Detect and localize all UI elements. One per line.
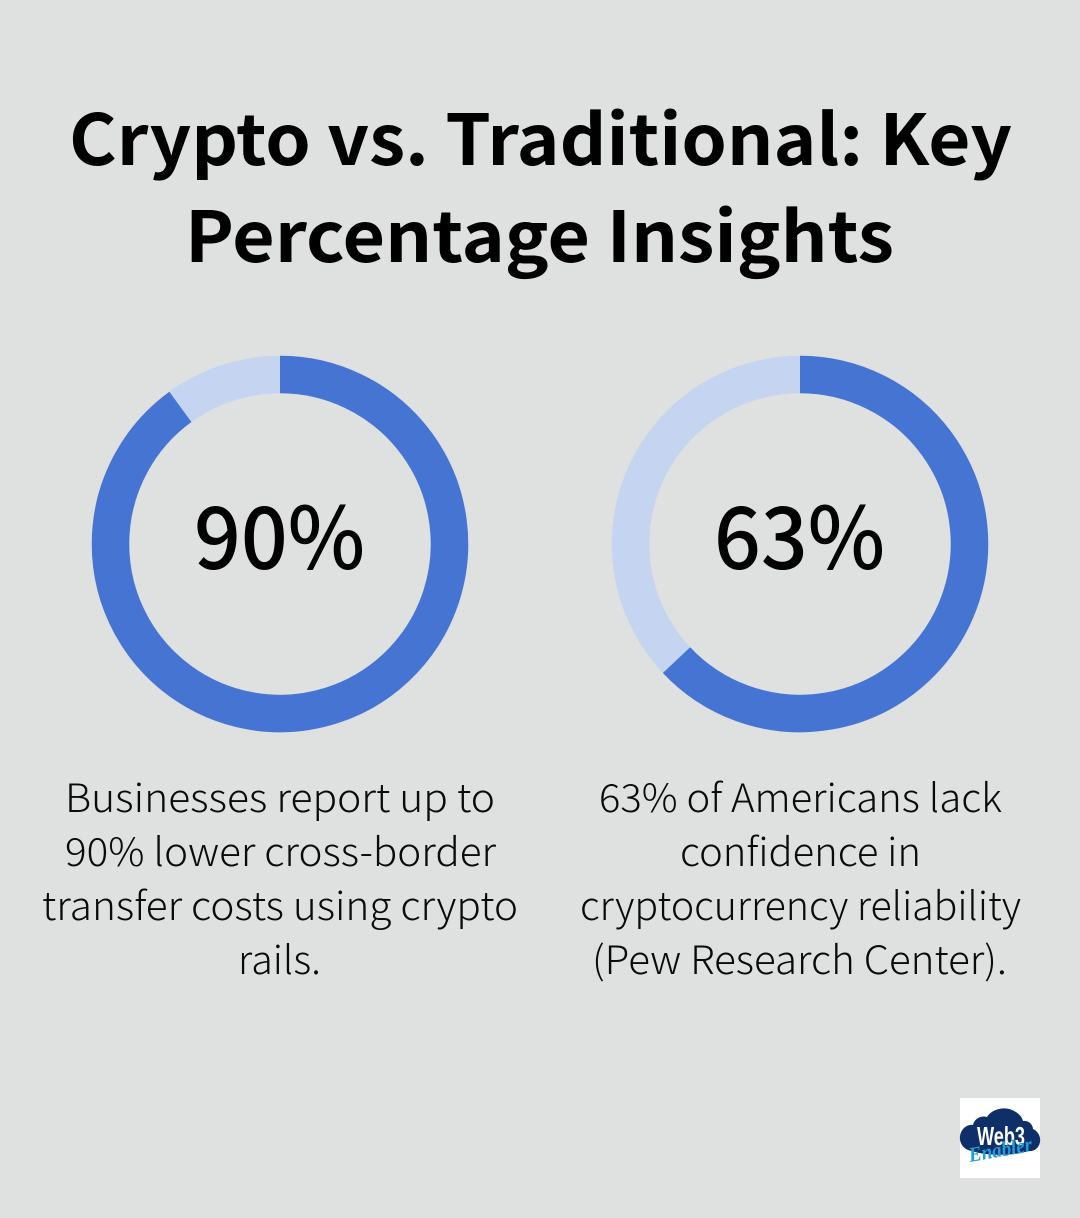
title: Crypto vs. Traditional: Key <box>69 85 1012 186</box>
donut chart: 63% <box>630 374 970 714</box>
description: confidence in crypto: cryptocurrency reliability <box>580 876 1021 932</box>
donut chart: 90% <box>110 374 450 714</box>
panel: 63% stat <box>580 374 1021 986</box>
title: Percentage Insights <box>185 182 894 283</box>
logo: Web3 Enabler <box>960 1098 1040 1178</box>
value: 63%: 63% <box>714 469 885 594</box>
description: cross-border costs: Businesses report up to <box>65 768 495 824</box>
description: confidence in crypto: confidence in <box>680 822 921 878</box>
icon: cloud <box>960 1108 1040 1155</box>
description: cross-border costs <box>42 768 518 986</box>
title <box>69 85 1012 283</box>
description: confidence in crypto: 63% of Americans lack <box>599 768 1002 824</box>
description: cross-border costs: rails. <box>238 930 321 986</box>
description: cross-border costs: 90% lower cross-border <box>65 822 497 878</box>
value: 90%: 90% <box>194 469 365 594</box>
description: cross-border costs: transfer costs using crypto <box>42 876 518 932</box>
panel: 90% stat <box>42 374 518 986</box>
script: Enabler: Enabler <box>966 1132 1035 1167</box>
description: confidence in crypto <box>580 768 1021 986</box>
description: confidence in crypto: (Pew Research Center). <box>592 930 1007 986</box>
wordmark: Web3 <box>977 1121 1025 1151</box>
